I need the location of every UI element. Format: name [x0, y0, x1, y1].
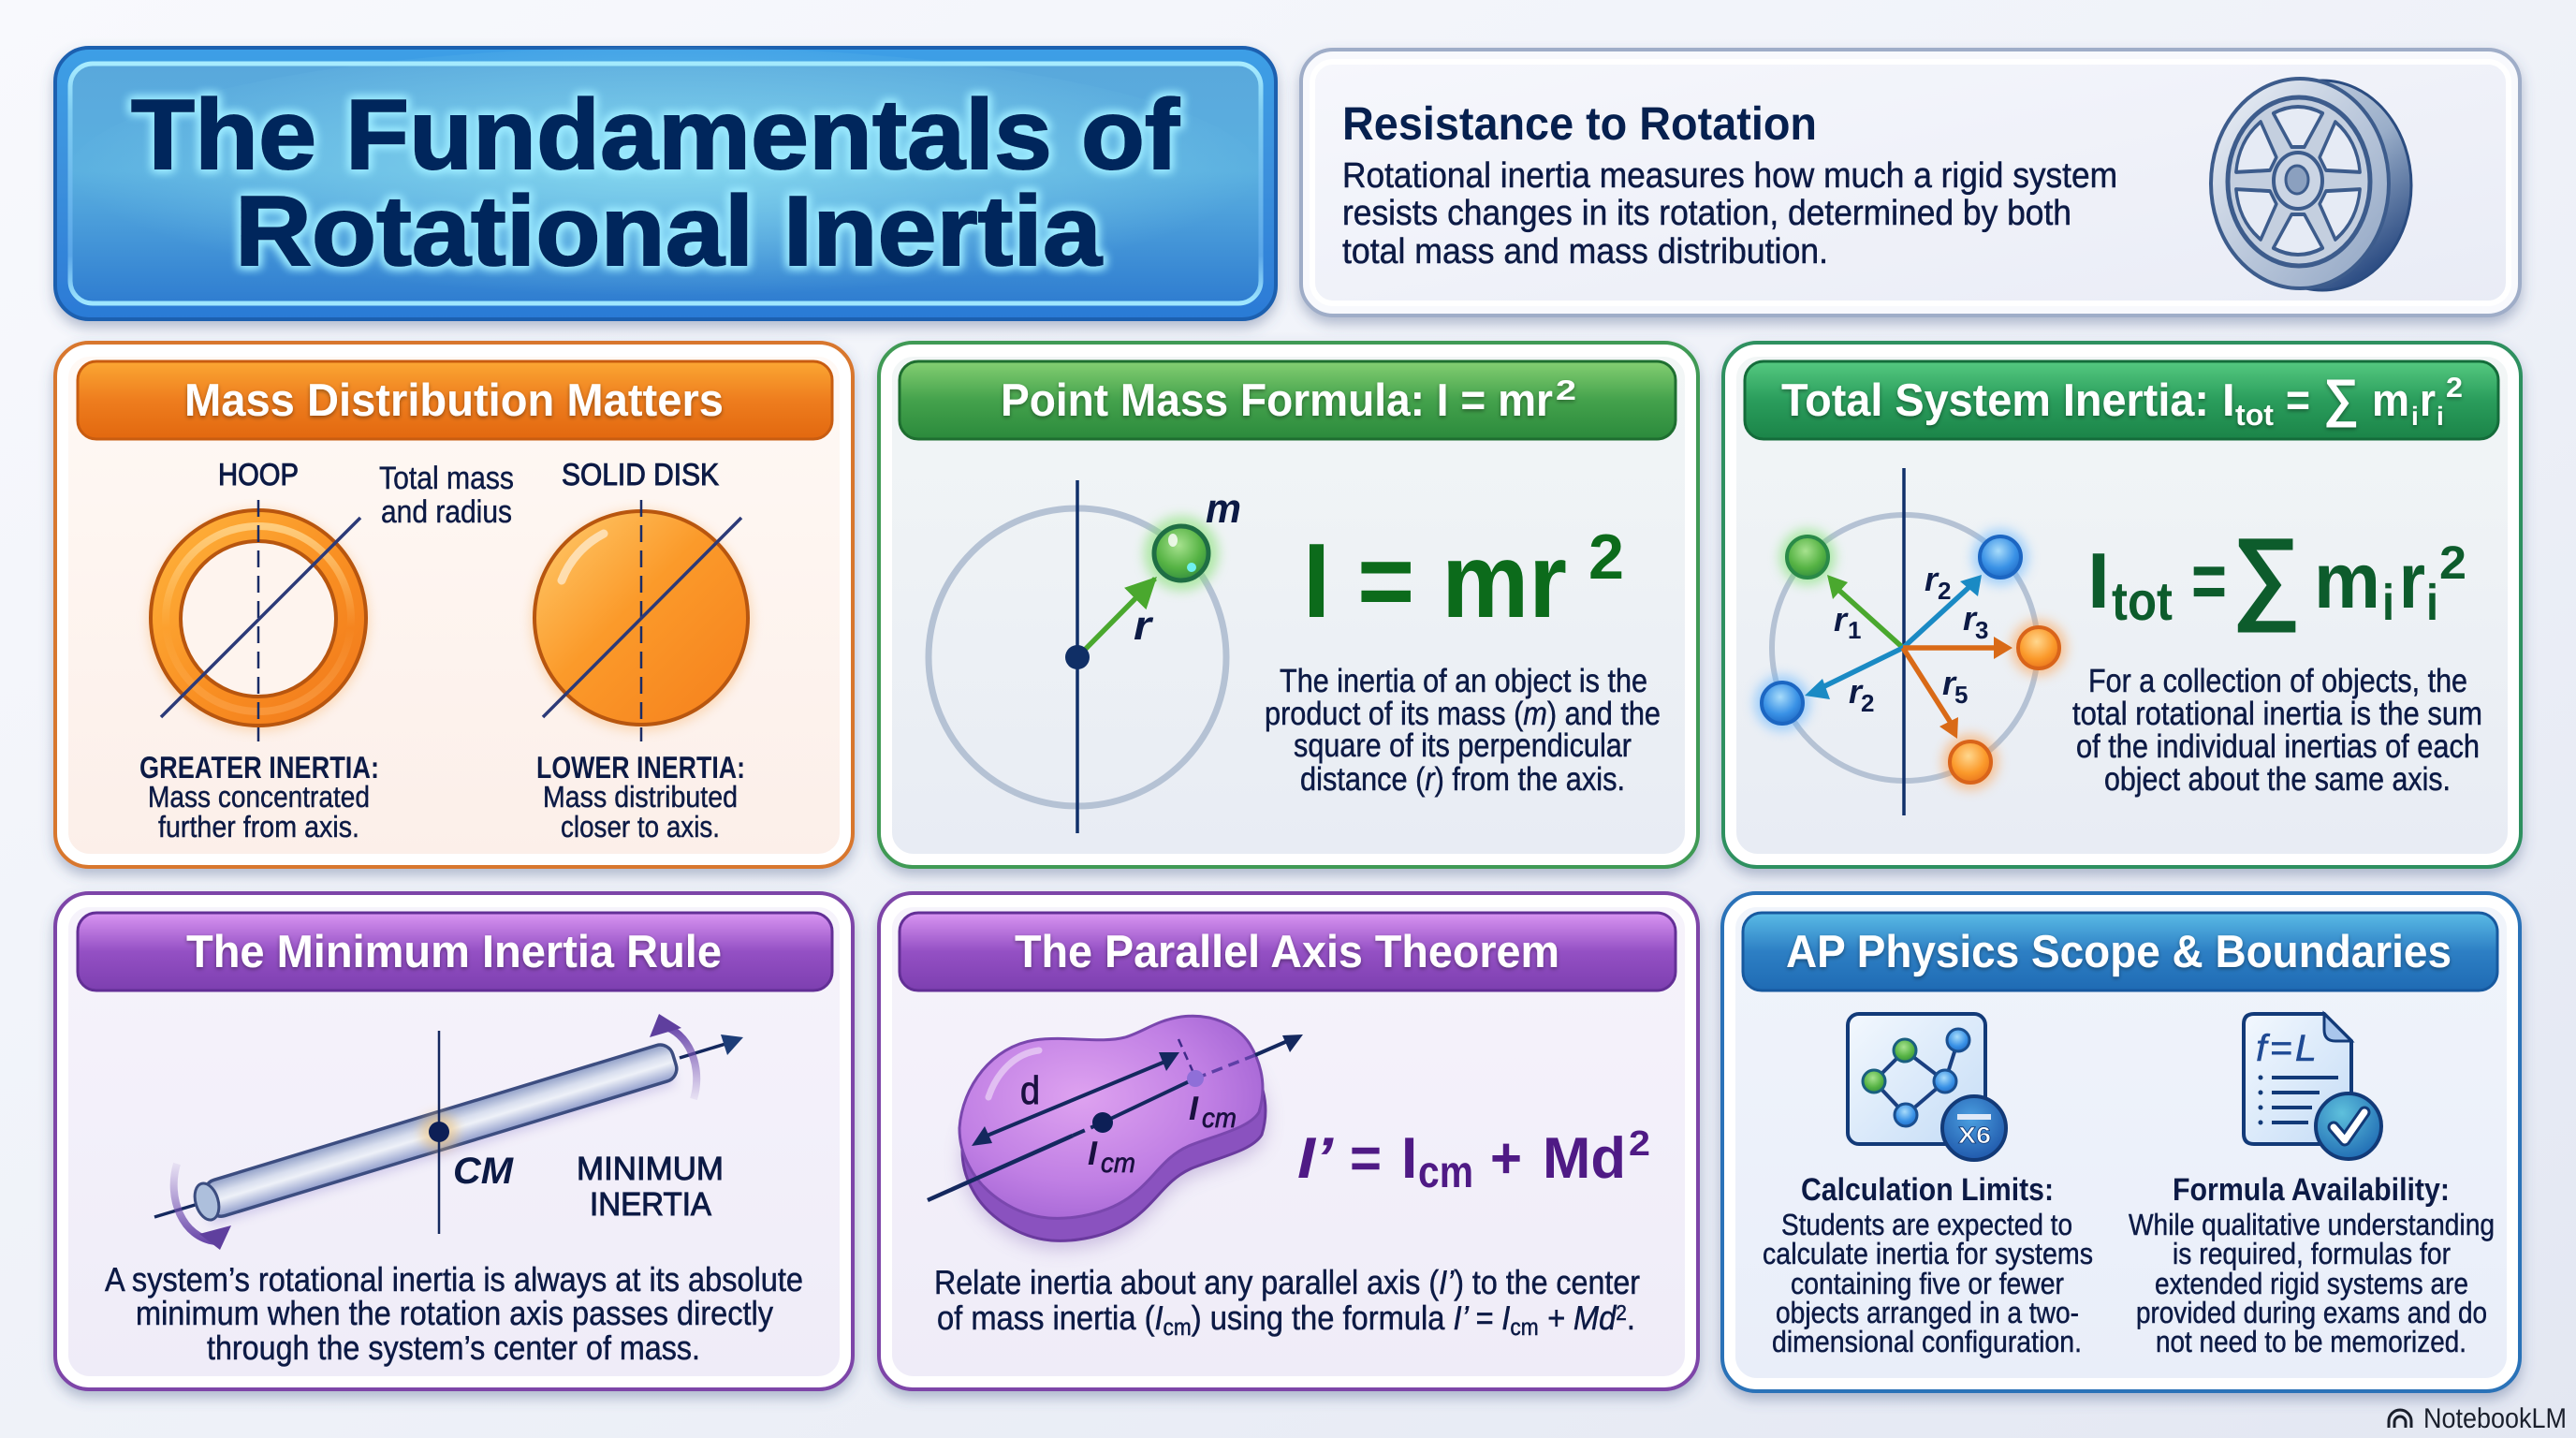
- text block: I’ = I: [1454, 1299, 1510, 1337]
- diagram: purple rigid body: d: [1020, 1068, 1040, 1112]
- text block: A system’s rotational inertia is always at its absolute: [105, 1260, 803, 1299]
- diagram: system of masses: r: [1942, 664, 1957, 702]
- header: total system inertia: tot: [2235, 398, 2274, 432]
- icon: calculation limits: X6: [1958, 1123, 1991, 1149]
- icon: solid disk: [531, 500, 752, 741]
- panel: parallel axis theorem: [879, 893, 1698, 1389]
- text block: [934, 1263, 1640, 1341]
- label: total mass and radius: [379, 461, 514, 530]
- text block: The inertia of an object is the: [1280, 663, 1647, 699]
- diagram: purple rigid body: cm: [1202, 1104, 1237, 1134]
- formula: I = mr squared: 2: [1588, 521, 1624, 593]
- text block: [1342, 156, 2117, 271]
- label: hoop: HOOP: [218, 457, 299, 492]
- header: mass distribution matters: [78, 361, 832, 439]
- formula: total inertia: I: [2087, 536, 2110, 624]
- text: formula availability: not need to be memorized.: [2156, 1325, 2466, 1358]
- diagram: system of masses: 2: [1861, 689, 1874, 717]
- title panel: [55, 47, 1276, 319]
- label: total mass and radius: Total mass: [379, 461, 514, 496]
- text block: + Md: [1539, 1299, 1617, 1337]
- text: calculation limits: Calculation Limits:: [1801, 1172, 2054, 1208]
- text block: product of its mass (m) and the: [1265, 696, 1661, 732]
- diagram: purple rigid body: [928, 1016, 1303, 1248]
- title: Rotational Inertia: [235, 176, 1103, 286]
- header: point mass formula: Point Mass Formula: I = mr: [1001, 375, 1553, 426]
- diagram: system of masses: r: [1834, 600, 1849, 638]
- header: minimum inertia rule: The Minimum Inertia Rule: [186, 927, 722, 977]
- text: formula availability: provided during exams and do: [2136, 1296, 2487, 1329]
- formula: total inertia: i: [2382, 575, 2394, 631]
- heading: Resistance to Rotation: [1342, 97, 1817, 150]
- formula: total inertia: 2: [2439, 536, 2466, 589]
- text: formula availability: [2129, 1172, 2495, 1358]
- diagram: system of masses: r: [1963, 599, 1978, 638]
- header: parallel axis theorem: [900, 913, 1676, 990]
- header: parallel axis theorem: The Parallel Axis Theorem: [1015, 927, 1559, 977]
- diagram: rod about center of mass: CM: [453, 1151, 515, 1192]
- header: AP physics scope: [1743, 913, 2497, 990]
- text block: .: [1627, 1299, 1635, 1337]
- caption: lower inertia: closer to axis.: [561, 810, 720, 844]
- text block: [2072, 663, 2482, 798]
- icon: hoop ring: [148, 500, 369, 741]
- text block: Relate inertia about any parallel axis (I’) to the center: [934, 1263, 1640, 1301]
- diagram: system of masses: 5: [1954, 681, 1968, 709]
- header: AP physics scope: AP Physics Scope & Boundaries: [1786, 927, 2452, 977]
- text: calculation limits: containing five or fewer: [1791, 1267, 2064, 1300]
- header: total system inertia: m: [2372, 375, 2409, 426]
- icon: formula sheet: [2244, 1014, 2381, 1159]
- header: point mass formula: 2: [1556, 375, 1576, 406]
- diagram: purple rigid body: I: [1088, 1134, 1098, 1172]
- header: total system inertia: i: [2437, 402, 2444, 431]
- caption: greater inertia: GREATER INERTIA:: [139, 750, 379, 785]
- formula: total inertia: [2087, 517, 2466, 633]
- caption: lower inertia: LOWER INERTIA:: [536, 750, 745, 785]
- text block: through the system’s center of mass.: [207, 1328, 700, 1367]
- icon: formula sheet: f=L: [2256, 1028, 2320, 1069]
- text block: Rotational inertia measures how much a rigid system: [1342, 156, 2117, 196]
- text block: cm: [1510, 1314, 1539, 1341]
- header: total system inertia: =: [2286, 375, 2310, 426]
- label: minimum inertia: MINIMUM: [577, 1151, 724, 1187]
- diagram: system of masses: 3: [1975, 616, 1988, 644]
- diagram: point mass orbit: m: [1206, 486, 1241, 532]
- header: total system inertia: ∑: [2323, 368, 2359, 428]
- icon: wheel: [2211, 79, 2411, 290]
- text: calculation limits: objects arranged in a two-: [1776, 1296, 2079, 1329]
- diagram: purple rigid body: cm: [1101, 1149, 1135, 1179]
- text: formula availability: While qualitative understanding: [2129, 1208, 2495, 1241]
- formula: parallel axis: +: [1490, 1126, 1522, 1191]
- text: calculation limits: calculate inertia for systems: [1763, 1237, 2093, 1270]
- formula: I = mr squared: I = mr: [1303, 521, 1567, 639]
- diagram: system of masses: r: [1849, 672, 1864, 711]
- formula: parallel axis: [1297, 1124, 1650, 1197]
- formula: total inertia: m: [2314, 536, 2380, 624]
- header: total system inertia: [1745, 361, 2498, 439]
- header: total system inertia: Total System Inertia:: [1781, 375, 2209, 426]
- header: minimum inertia rule: [78, 913, 832, 990]
- formula: total inertia: =: [2191, 536, 2227, 624]
- text block: 2: [1616, 1300, 1627, 1325]
- header: mass distribution matters: Mass Distribution Matters: [184, 375, 724, 426]
- diagram: point mass orbit: r: [1134, 603, 1154, 649]
- diagram: purple rigid body: I: [1189, 1089, 1199, 1127]
- formula: parallel axis: =: [1350, 1126, 1382, 1191]
- caption: greater inertia: further from axis.: [158, 810, 359, 844]
- diagram: system of masses: r: [1925, 560, 1939, 598]
- text block: For a collection of objects, the: [2088, 663, 2467, 699]
- panel: mass distribution matters: [55, 343, 853, 867]
- text block: total mass and mass distribution.: [1342, 232, 1828, 271]
- caption: greater inertia: Mass concentrated: [148, 780, 370, 814]
- diagram: system of masses: 2: [1938, 577, 1951, 605]
- header: total system inertia: i: [2411, 402, 2419, 431]
- text: calculation limits: Students are expected to: [1781, 1208, 2072, 1241]
- formula: total inertia: i: [2426, 575, 2438, 631]
- text block: minimum when the rotation axis passes directly: [136, 1294, 773, 1332]
- caption: greater inertia: [139, 750, 379, 844]
- header: point mass formula: [900, 361, 1676, 439]
- label: minimum inertia: INERTIA: [590, 1186, 712, 1223]
- label: total mass and radius: and radius: [381, 494, 512, 530]
- formula: parallel axis: 2: [1629, 1124, 1650, 1164]
- text: formula availability: Formula Availability:: [2173, 1172, 2450, 1208]
- text block: of the individual inertias of each: [2076, 728, 2480, 765]
- diagram: system of masses: 1: [1848, 616, 1861, 644]
- formula: parallel axis: I: [1401, 1126, 1417, 1191]
- panel: total system inertia: [1723, 343, 2521, 867]
- text block: total rotational inertia is the sum: [2072, 696, 2482, 732]
- text block: [1265, 663, 1661, 798]
- text: formula availability: extended rigid systems are: [2155, 1267, 2468, 1300]
- text block: resists changes in its rotation, determined by both: [1342, 194, 2071, 233]
- header: total system inertia: I: [2222, 375, 2235, 426]
- caption: lower inertia: Mass distributed: [543, 780, 738, 814]
- caption: lower inertia: [536, 750, 745, 844]
- formula: parallel axis: cm: [1418, 1148, 1473, 1197]
- formula: parallel axis: I’: [1297, 1126, 1334, 1191]
- text block: square of its perpendicular: [1294, 727, 1632, 764]
- text: formula availability: is required, formulas for: [2173, 1237, 2451, 1270]
- icon: calculation limits: [1848, 1014, 2006, 1160]
- diagram: system of masses: [1754, 468, 2067, 815]
- panel: point mass formula: [879, 343, 1698, 867]
- text: calculation limits: dimensional configuration.: [1772, 1325, 2082, 1358]
- text block: cm: [1164, 1314, 1192, 1341]
- title: The Fundamentals of: [131, 80, 1180, 190]
- diagram: point mass orbit: [929, 480, 1241, 833]
- text block: [105, 1260, 803, 1367]
- text block: ) using the formula: [1192, 1299, 1454, 1337]
- panel: minimum inertia rule: [55, 893, 853, 1389]
- label: solid disk: SOLID DISK: [562, 457, 719, 492]
- panel: resistance to rotation: [1301, 50, 2520, 315]
- formula: parallel axis: Md: [1543, 1126, 1626, 1191]
- header: total system inertia: r: [2420, 375, 2436, 426]
- text block: distance (r) from the axis.: [1300, 761, 1625, 798]
- formula: total inertia: ∑: [2232, 517, 2301, 633]
- diagram: rod about center of mass: [154, 1014, 743, 1250]
- text block: object about the same axis.: [2104, 761, 2451, 798]
- text: calculation limits: [1763, 1172, 2093, 1358]
- header: total system inertia: 2: [2446, 373, 2463, 404]
- text block: of mass inertia (I: [937, 1299, 1177, 1337]
- formula: total inertia: r: [2399, 536, 2425, 624]
- label: minimum inertia: [577, 1151, 724, 1223]
- formula: total inertia: tot: [2112, 571, 2173, 632]
- title: [131, 80, 1180, 286]
- panel: AP physics scope and boundaries: [1722, 893, 2520, 1391]
